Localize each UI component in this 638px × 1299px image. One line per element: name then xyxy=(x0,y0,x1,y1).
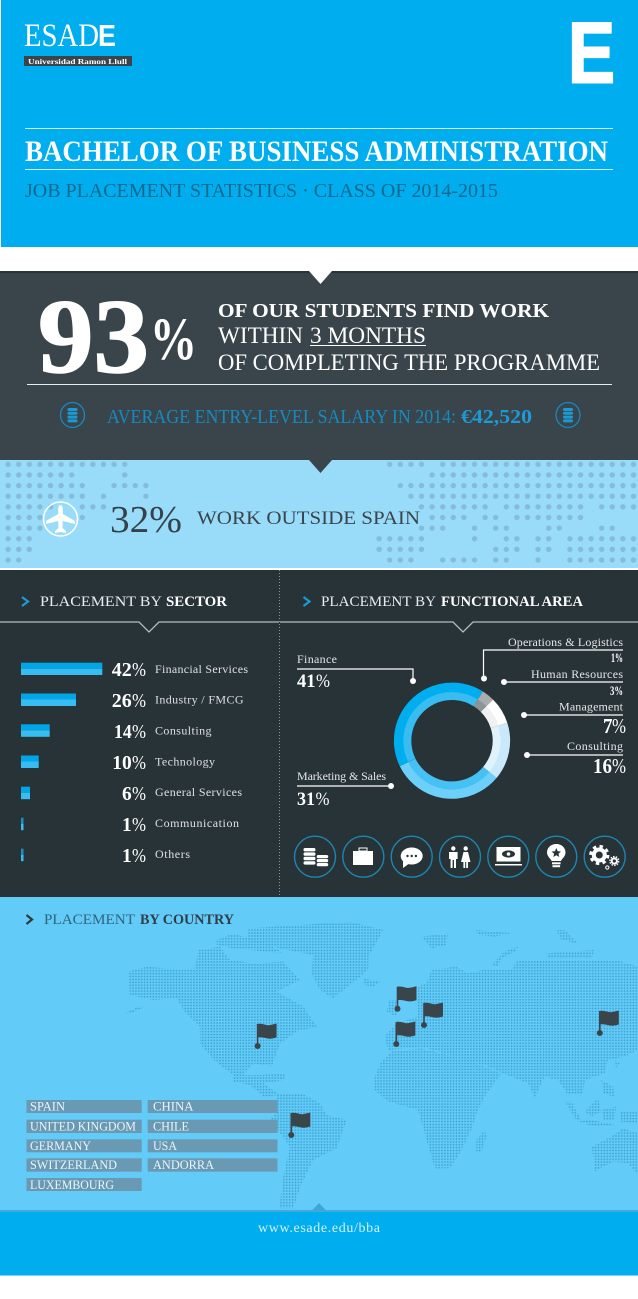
panel: 93 percent headline xyxy=(0,271,638,460)
flag: China xyxy=(597,1010,619,1036)
country list: CHINA xyxy=(153,1098,194,1114)
text: work outside Spain: WORK OUTSIDE SPAIN xyxy=(197,508,420,529)
country list: SPAIN xyxy=(30,1098,66,1114)
panel: placement by country xyxy=(0,897,638,1211)
bar: General Services: General Services xyxy=(155,785,242,799)
bar: Communication: Communication xyxy=(155,816,239,830)
callout: Management xyxy=(521,700,626,738)
panel: work outside Spain xyxy=(0,459,638,568)
callout: Consulting xyxy=(524,739,626,778)
country list: LUXEMBOURG xyxy=(30,1177,114,1192)
logo: ESADE xyxy=(24,18,132,66)
bar: Industry: Industry / FMCG xyxy=(155,693,244,707)
logo: ESADE: ESAD xyxy=(24,18,99,54)
icon: briefcase xyxy=(343,836,384,877)
salary line: AVERAGE ENTRY-LEVEL SALARY IN 2014: xyxy=(107,406,456,428)
icon: speech bubble xyxy=(391,836,432,877)
bar: Others xyxy=(21,845,190,867)
bar: Others: % xyxy=(132,845,146,867)
callout: Human Resources: Human Resources xyxy=(531,667,623,681)
callout: Management: Management xyxy=(559,700,624,714)
callout: Marketing and Sales xyxy=(297,769,394,810)
heading: by country xyxy=(26,912,234,928)
heading: sector: SECTOR xyxy=(166,594,227,610)
flag: USA xyxy=(255,1024,277,1049)
callout: Marketing and Sales: % xyxy=(316,789,330,810)
icon: light bulb with star xyxy=(536,836,577,877)
country list: GERMANY xyxy=(30,1138,92,1153)
icon row: functional areas xyxy=(294,836,625,877)
bar: Consulting xyxy=(21,721,212,743)
bar: General Services: % xyxy=(132,783,146,805)
heading: by country: PLACEMENT xyxy=(44,912,135,928)
panel: placement by functional area xyxy=(280,594,638,877)
flag: Spain xyxy=(393,1022,415,1047)
flag: United Kingdom xyxy=(394,986,416,1012)
country list: CHILE xyxy=(153,1118,189,1134)
text block: work statement xyxy=(218,300,600,375)
bar: General Services xyxy=(21,783,242,805)
world map: Americas and Greenland xyxy=(125,922,383,1208)
text block: work statement: OF COMPLETING THE PROGRAMME xyxy=(218,350,600,375)
bar: Industry: % xyxy=(132,690,146,712)
country list: UNITED KINGDOM xyxy=(30,1118,136,1134)
country list xyxy=(26,1098,278,1192)
icon: right coins xyxy=(556,402,580,428)
panel: header xyxy=(1,0,638,247)
statistic: 93% xyxy=(38,278,197,395)
bar: Consulting: 14 xyxy=(114,721,132,743)
callout: Finance xyxy=(297,652,416,692)
callout: Management: 7 xyxy=(603,714,612,738)
callout: Operations and Logistics: 1% xyxy=(611,651,623,665)
bar: Communication xyxy=(21,814,239,836)
bar: Communication: % xyxy=(132,814,146,836)
icon: finance coins xyxy=(294,836,336,877)
heading: sector: PLACEMENT BY xyxy=(40,594,162,610)
heading: functional area xyxy=(304,594,583,610)
statistic: 93%: 93 xyxy=(38,278,149,395)
logo: ESADE: E xyxy=(98,18,116,53)
callout: Human Resources xyxy=(501,667,623,698)
panel: placement charts background xyxy=(0,570,638,897)
bar: Consulting: % xyxy=(132,721,146,743)
heading: functional area: PLACEMENT BY xyxy=(321,594,436,610)
subtitle: JOB PLACEMENT STATISTICS · CLASS OF 2014-2015 xyxy=(25,180,498,202)
icon: plane xyxy=(44,502,78,536)
callout: Management: % xyxy=(612,714,626,738)
bar: Technology xyxy=(21,752,215,774)
heading: by country: BY COUNTRY xyxy=(140,912,234,928)
logo: ESADE: Universidad Ramon Llull xyxy=(28,57,127,66)
bar: General Services: 6 xyxy=(122,783,132,805)
bar chart: sector xyxy=(21,659,248,867)
icon: laptop with eye xyxy=(488,836,529,877)
bar: Technology: Technology xyxy=(155,754,215,768)
callout: Marketing and Sales: Marketing & Sales xyxy=(297,769,386,783)
salary line: €42,520 xyxy=(461,406,532,428)
icon: gears xyxy=(584,836,625,877)
bar: Consulting: Consulting xyxy=(155,724,212,738)
icon: man and woman xyxy=(440,836,480,877)
bar: Industry: 26 xyxy=(112,690,132,712)
panel: footer xyxy=(0,1203,638,1276)
country list: SWITZERLAND xyxy=(30,1157,117,1172)
flag: Chile xyxy=(288,1112,310,1138)
text block: work statement: 3 MONTHS xyxy=(310,323,426,348)
bar: Others: Others xyxy=(155,847,190,861)
text block: work statement: WITHIN xyxy=(218,323,303,348)
callout: Operations and Logistics xyxy=(481,635,623,682)
bar: Financial Services xyxy=(21,659,248,681)
flag: Germany xyxy=(421,1002,443,1028)
callout: Operations and Logistics: Operations & Logistics xyxy=(508,635,623,649)
icon: large E mark: E xyxy=(568,6,615,102)
callout: Marketing and Sales: 31 xyxy=(297,789,315,810)
country list: USA xyxy=(153,1138,178,1153)
country list: ANDORRA xyxy=(153,1157,215,1172)
footer link: www.esade.edu/bba xyxy=(258,1221,381,1236)
heading: sector xyxy=(22,594,227,610)
world map: Europe, Africa, Asia and Australia xyxy=(375,930,638,1175)
bar: Technology: 10 xyxy=(112,752,132,774)
callout: Finance: Finance xyxy=(297,652,337,666)
bar: Financial Services: Financial Services xyxy=(155,662,248,676)
callout: Consulting: % xyxy=(612,754,626,778)
bar: Financial Services: % xyxy=(132,659,146,681)
statistic: 93%: % xyxy=(150,306,197,372)
callout: Human Resources: 3% xyxy=(610,684,623,698)
bar: Industry xyxy=(21,690,244,712)
bar: Others: 1 xyxy=(122,845,132,867)
icon: left coins xyxy=(60,402,84,428)
panel: placement by sector xyxy=(0,594,279,867)
callout: Consulting: Consulting xyxy=(567,739,623,753)
statistic: 32%: 32% xyxy=(110,499,182,541)
bar: Technology: % xyxy=(132,752,146,774)
donut chart: functional areas xyxy=(377,665,527,816)
bar: Financial Services: 42 xyxy=(112,659,132,681)
callout: Finance: % xyxy=(316,671,330,692)
heading: functional area: FUNCTIONAL AREA xyxy=(441,594,583,610)
callout: Consulting: 16 xyxy=(593,754,612,778)
text block: work statement: OF OUR STUDENTS FIND WORK xyxy=(218,300,549,322)
bar: Communication: 1 xyxy=(122,814,132,836)
callout: Finance: 41 xyxy=(297,671,316,692)
